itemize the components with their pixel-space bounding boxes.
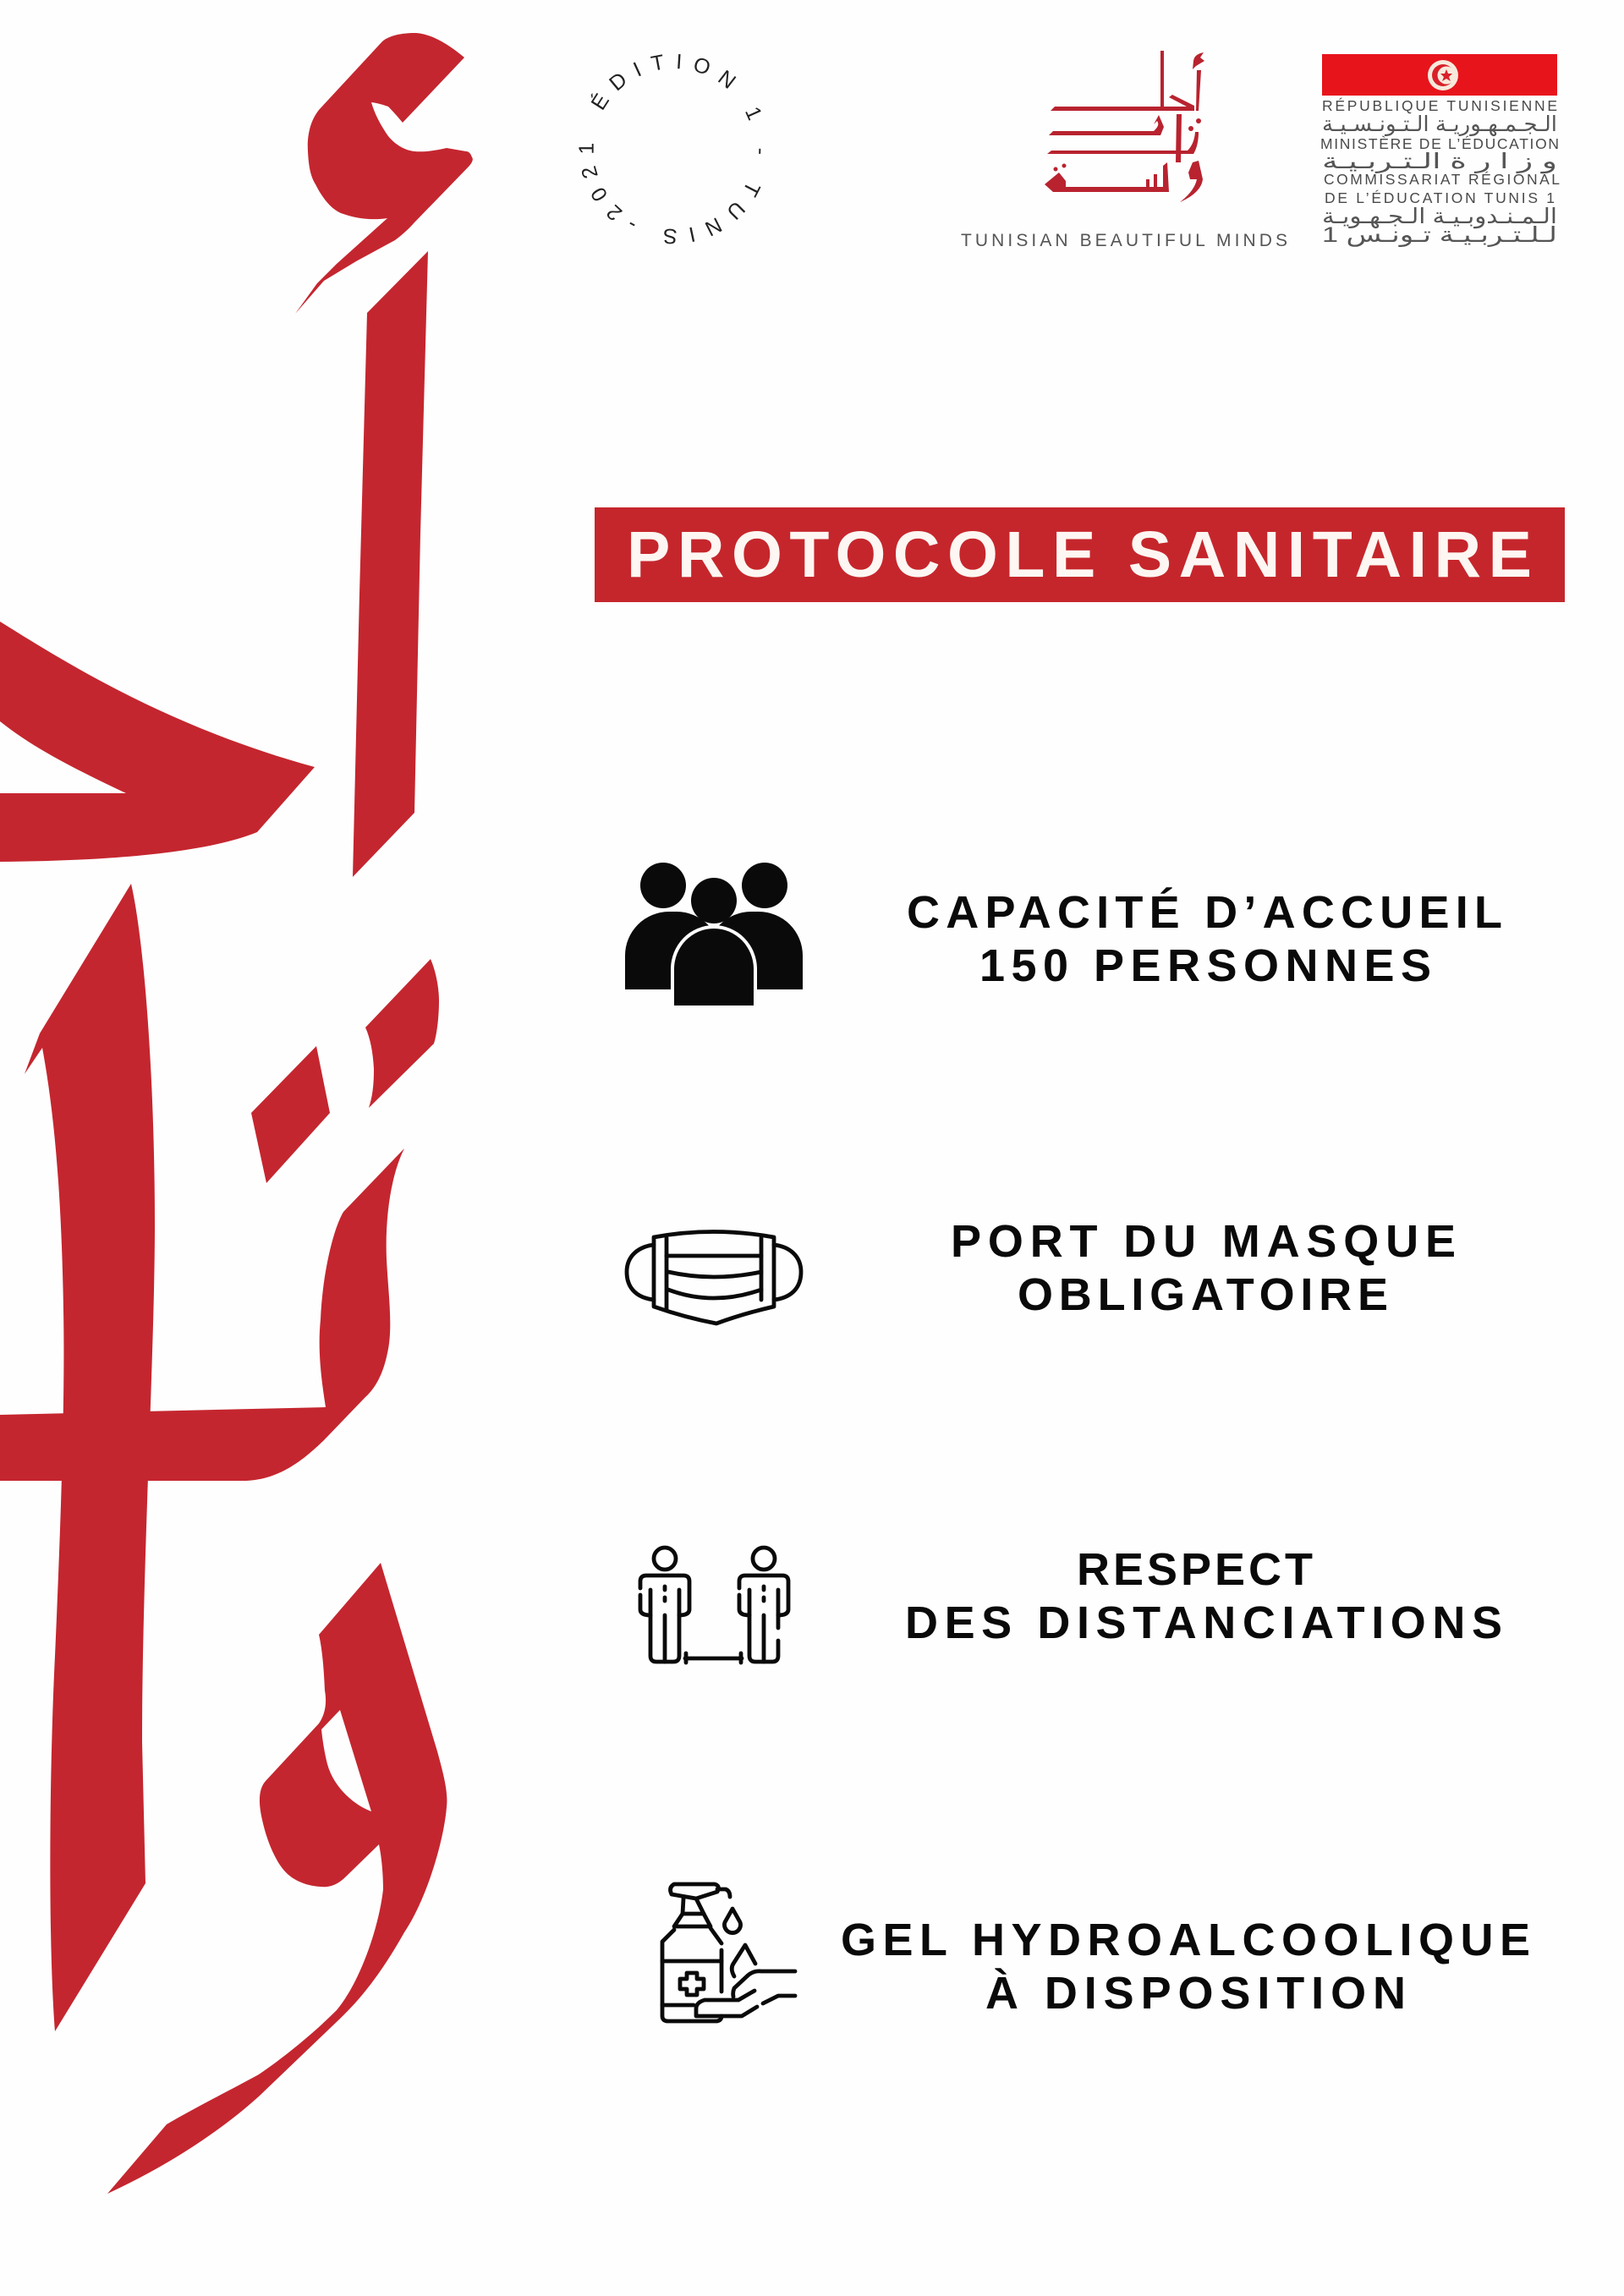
ministry text lines: MINISTÈRE DE L’ÉDUCATION — [1320, 135, 1559, 152]
text: distancing — [905, 1544, 1502, 1648]
calligraphy: upper alef — [353, 251, 428, 877]
calligraphy: large red Arabic letterforms — [0, 33, 473, 2194]
icon: social distancing — [640, 1548, 788, 1663]
text: distancing: DES DISTANCIATIONS — [905, 1597, 1502, 1648]
text: capacity: CAPACITÉ D’ACCUEIL — [907, 887, 1502, 938]
logo: Tunisian Beautiful Minds calligraphic mark — [1045, 51, 1204, 202]
text: capacity: 150 PERSONNES — [979, 940, 1431, 991]
ministry text lines — [1320, 97, 1560, 247]
edition badge: circular text: ÉDITION 1 - TUNIS -2021 — [579, 54, 761, 244]
text: sanitizer: GEL HYDROALCOOLIQUE — [841, 1915, 1530, 1965]
calligraphy: ta stroke and bowl — [0, 1148, 404, 1481]
calligraphy: lower alef — [25, 884, 155, 2031]
calligraphy: horizontal ha stroke — [0, 622, 315, 862]
calligraphy: second dot — [365, 959, 439, 1108]
person right — [739, 1548, 788, 1662]
icon: group of people — [625, 863, 803, 1008]
ministry text lines: COMMISSARIAT RÉGIONAL — [1324, 171, 1560, 188]
icon: hand sanitizer — [662, 1884, 795, 2021]
calligraphy: diamond dot — [251, 1046, 330, 1183]
text: sanitizer — [841, 1915, 1530, 2019]
distance marker — [685, 1653, 742, 1663]
text: sanitizer: À DISPOSITION — [985, 1968, 1406, 2019]
ministry text lines: الـمـنـدوبـيـة الـجـهـويـة — [1322, 205, 1557, 229]
calligraphy: hamza — [295, 33, 473, 314]
flag of Tunisia — [1322, 54, 1557, 96]
text: distancing: RESPECT — [1077, 1544, 1313, 1595]
logo caption: TUNISIAN BEAUTIFUL MINDS — [961, 231, 1287, 250]
text: capacity — [907, 887, 1502, 991]
text: mask: OBLIGATOIRE — [1018, 1269, 1388, 1320]
calligraphy: waw — [107, 1563, 447, 2194]
icon: face mask — [627, 1231, 801, 1323]
ministry text lines: الـجـمـهـوريـة الـتـونـسـيـة — [1322, 112, 1557, 137]
ministry text lines: و ز ا ر ة الـتـربـيـة — [1322, 150, 1557, 174]
ministry block: flag and names — [1320, 54, 1560, 247]
ministry text lines: لـلـتـربـيـة تـونـس 1 — [1322, 223, 1557, 247]
person left — [640, 1548, 689, 1662]
title banner: PROTOCOLE SANITAIRE — [627, 518, 1532, 591]
ministry text lines: DE L’ÉDUCATION TUNIS 1 — [1325, 189, 1555, 206]
text: mask: PORT DU MASQUE — [951, 1216, 1456, 1267]
text: mask — [951, 1216, 1456, 1320]
ministry text lines: RÉPUBLIQUE TUNISIENNE — [1322, 97, 1557, 114]
